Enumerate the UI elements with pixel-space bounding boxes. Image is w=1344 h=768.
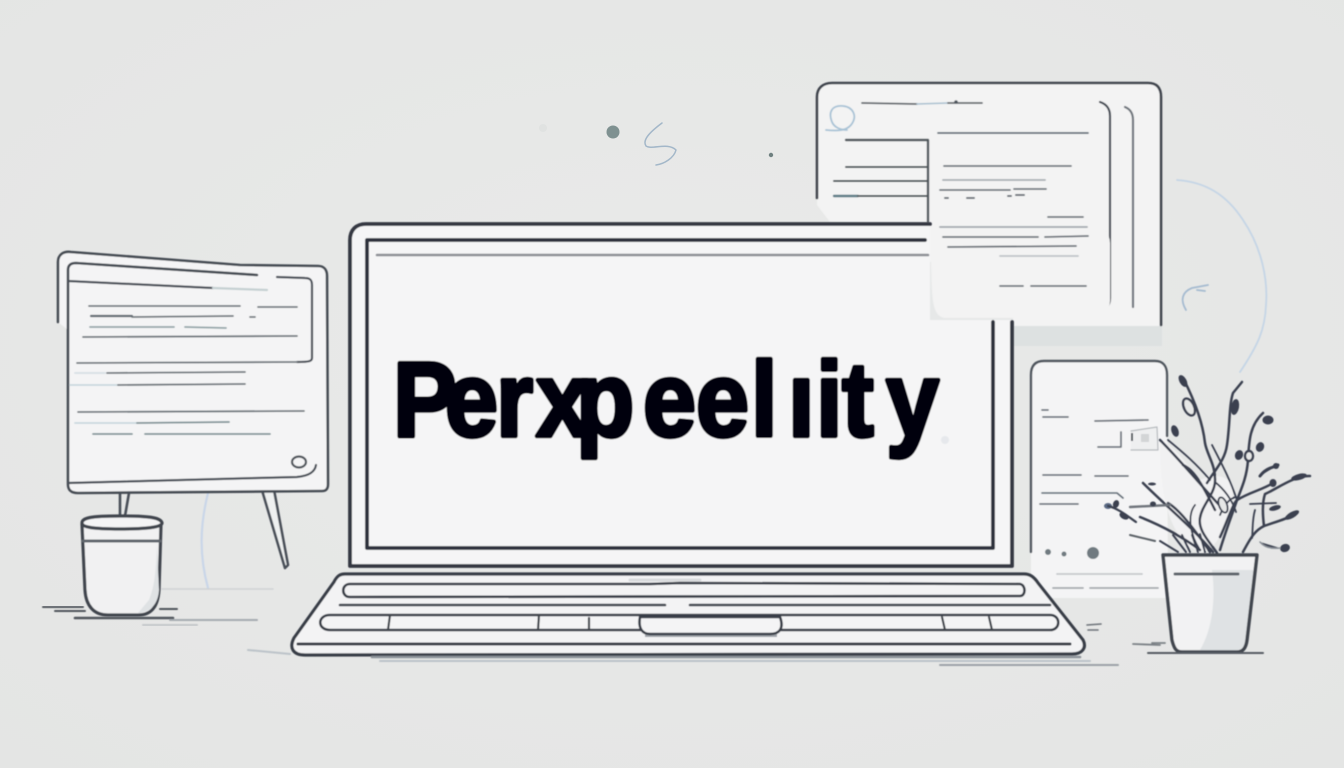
document foreground card [920, 225, 1110, 319]
left board stand legs [120, 490, 288, 568]
laptop inner screen outline [367, 240, 993, 548]
panel: lower right document [1031, 361, 1168, 598]
document back sheet [817, 83, 1161, 326]
blue arc behind right side [1177, 180, 1266, 372]
decorative marks above laptop [539, 123, 773, 165]
laptop screen white fill [350, 224, 1012, 566]
lower document lines [1040, 410, 1158, 588]
ground lines under cup [43, 607, 257, 625]
lower document dots [1045, 547, 1099, 559]
lower document sheet [1031, 361, 1168, 598]
plant leaves [1104, 374, 1308, 553]
document body text lines [938, 133, 1088, 286]
document side box with lines [834, 140, 928, 222]
left board inner frame [68, 277, 316, 483]
panel: left board [58, 252, 328, 568]
laptop screen top highlight line [377, 254, 928, 256]
plant branches [1130, 378, 1310, 553]
laptop bezel outline [350, 224, 1012, 566]
icon: cup [82, 516, 162, 615]
title: Perxpeelity wordmark: Perxpeelıity [393, 341, 939, 459]
keyboard front edge [298, 642, 1070, 646]
document stack edges [1100, 102, 1133, 309]
desk shadow lines [248, 624, 1165, 665]
plant light backing [1160, 440, 1233, 552]
keyboard deck [292, 574, 1084, 655]
blue arc behind left board [162, 493, 273, 589]
icon: potted plant [1104, 374, 1310, 653]
document shadow [1012, 322, 1162, 346]
panel: upper right document stack [817, 83, 1162, 346]
left board button circle [292, 456, 306, 468]
left board body [58, 252, 328, 493]
left board text lines [70, 306, 304, 434]
keyboard key dividers [388, 615, 992, 630]
document heading line and logo circle [826, 100, 982, 130]
keyboard bottom row [320, 615, 1058, 630]
keyboard middle row lines [340, 580, 1050, 605]
panel: laptop screen [350, 224, 1012, 566]
plant stem to first branch [1108, 506, 1136, 522]
ground line under pot [1148, 652, 1263, 654]
keyboard top row [343, 583, 1024, 597]
keyboard space bar [639, 617, 782, 637]
plant pot [1163, 555, 1257, 652]
lower document small button [1131, 427, 1158, 450]
panel: keyboard [292, 574, 1084, 657]
